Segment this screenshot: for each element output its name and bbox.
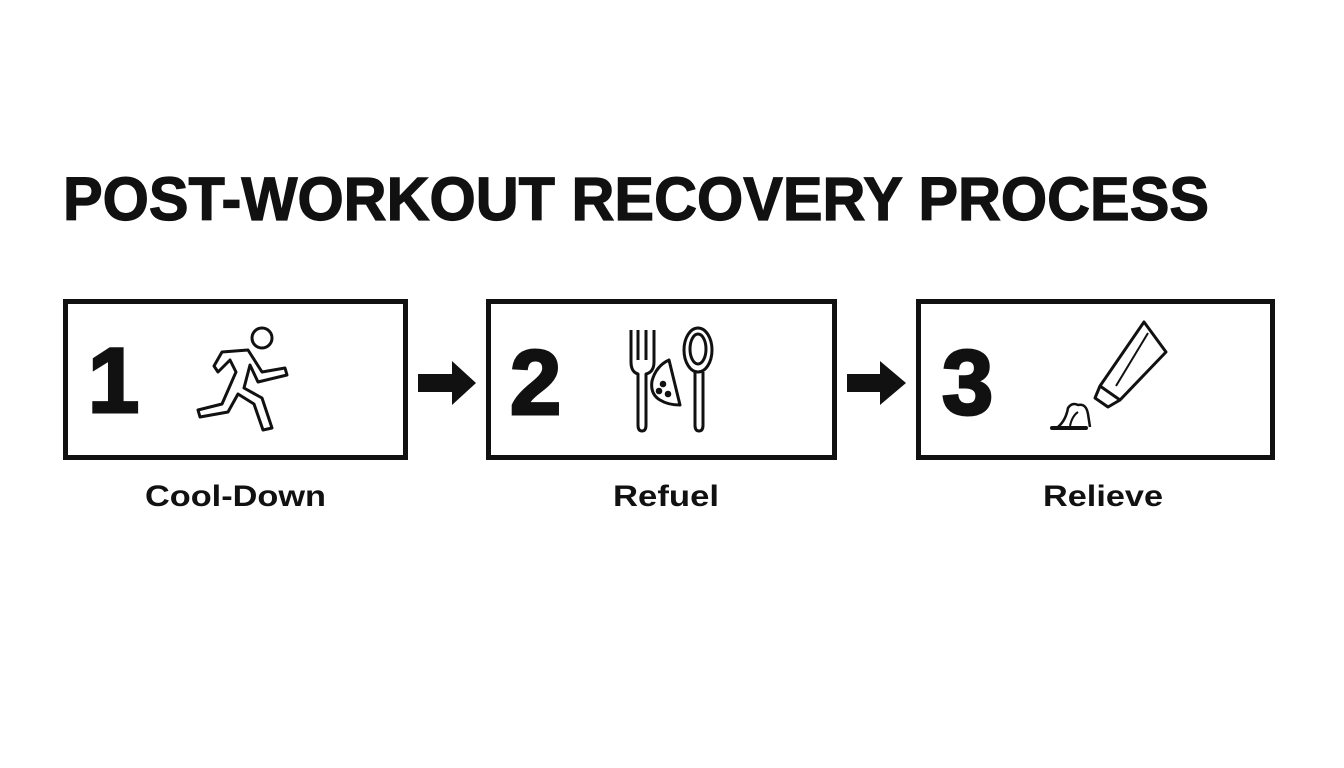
arrow 1 bbox=[418, 361, 476, 405]
number 1: 1 bbox=[88, 330, 139, 432]
label: Relieve: Relieve bbox=[1043, 480, 1163, 513]
icon: ointment tube bbox=[1052, 322, 1166, 428]
panel: step 2 refuel bbox=[488, 302, 834, 458]
arrow 2 bbox=[847, 361, 906, 405]
icon: runner bbox=[198, 328, 287, 430]
icon: fork, food, spoon bbox=[631, 328, 712, 431]
label: Cool-Down: Cool-Down bbox=[145, 480, 326, 513]
panel: step 3 relieve bbox=[918, 302, 1272, 458]
label: Refuel: Refuel bbox=[613, 480, 719, 513]
number 2: 2 bbox=[510, 332, 561, 434]
number 3: 3 bbox=[942, 332, 993, 434]
title: POST-WORKOUT RECOVERY PROCESS bbox=[63, 165, 1209, 233]
panel: step 1 cool-down bbox=[66, 302, 406, 458]
